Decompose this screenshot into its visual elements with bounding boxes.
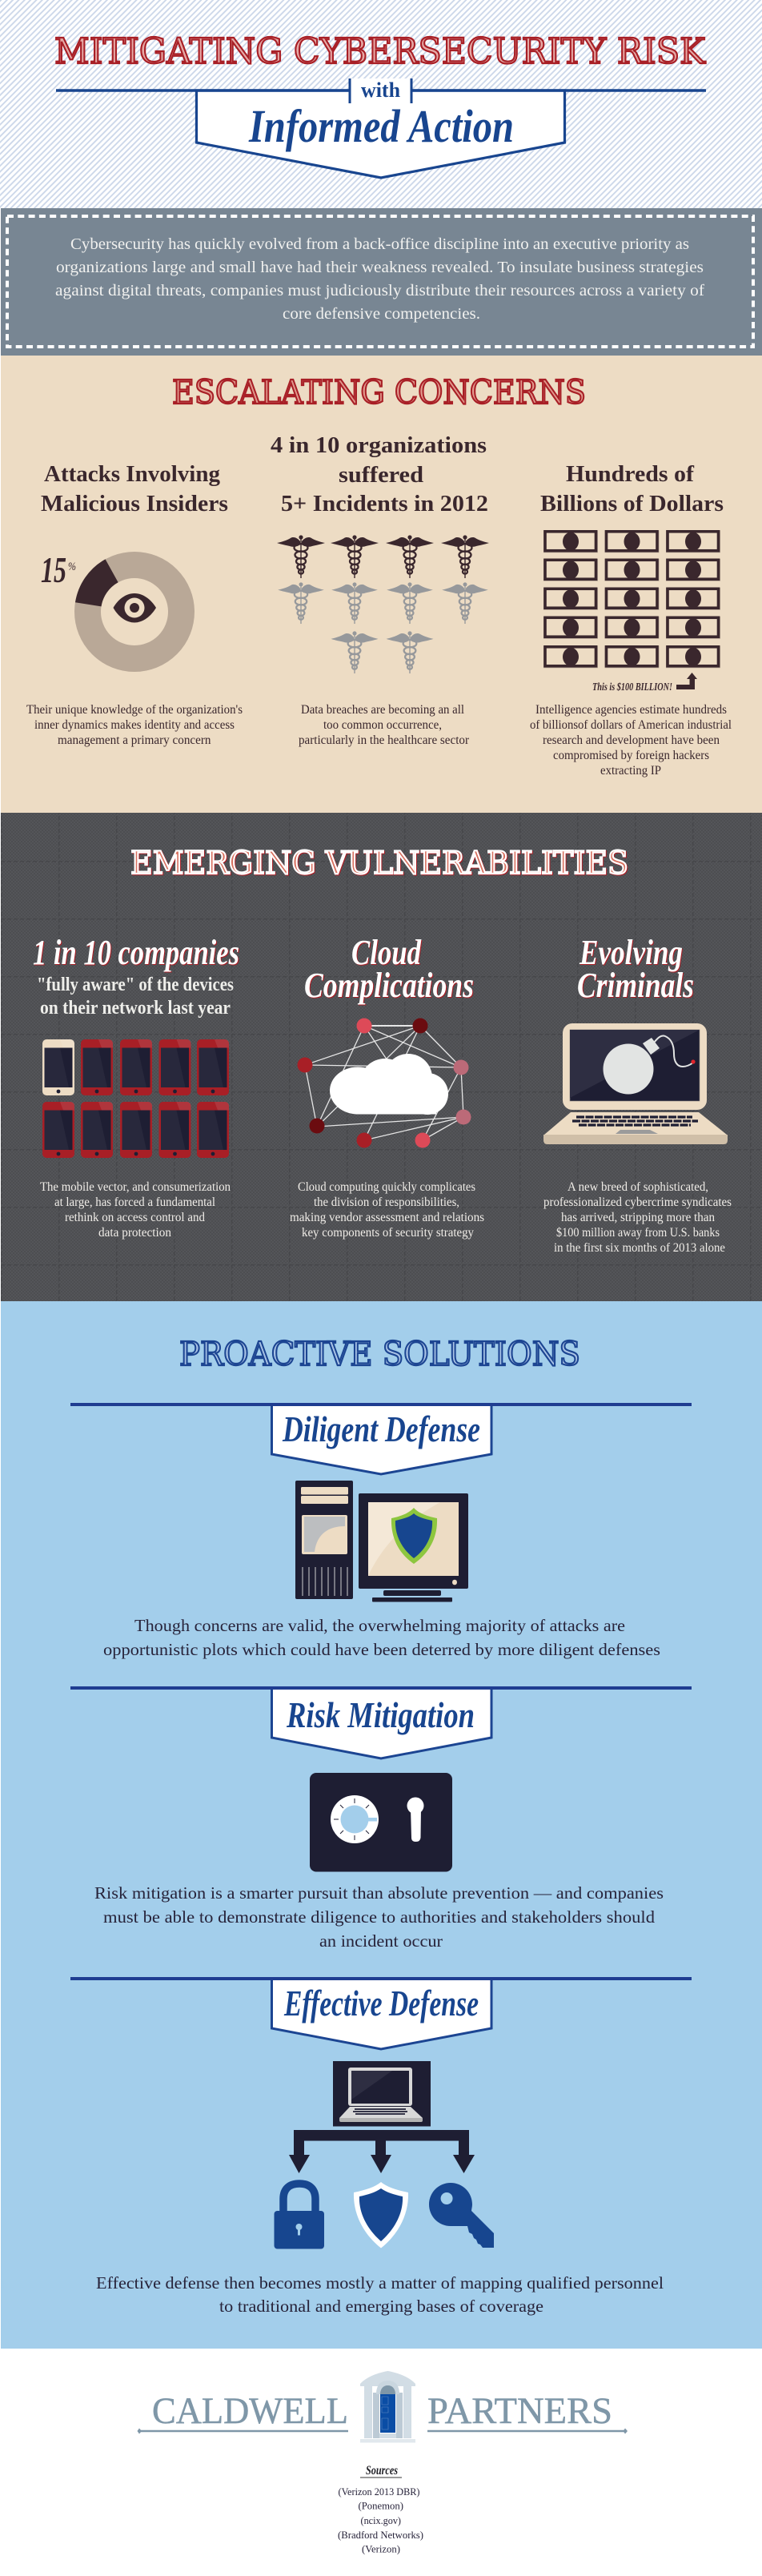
text: criminals: $100 million away from U.S. banks — [556, 1226, 720, 1240]
column heading: insiders — [41, 462, 228, 516]
icon: cloud network — [298, 1019, 471, 1148]
panel: intro — [1, 208, 762, 356]
intro text: organizations large and small have had their weakness revealed. To insulate business strategies — [56, 259, 704, 276]
panel: header — [0, 0, 762, 208]
heading: escalating concerns: ESCALATING CONCERNS — [172, 373, 586, 412]
text: mobile: data protection — [98, 1226, 171, 1240]
column heading: incidents: 5+ Incidents in 2012 — [281, 492, 488, 516]
text: cloud: the division of responsibilities, — [314, 1196, 459, 1209]
text: insiders: management a primary concern — [58, 733, 211, 747]
column subheading: fully aware: on their network last year — [40, 998, 231, 1019]
intro text: core defensive competencies. — [283, 305, 480, 323]
stat: 15 percent: 15 — [41, 549, 66, 590]
sources list: (Verizon) — [362, 2543, 400, 2554]
column subheading: fully aware — [37, 975, 234, 1019]
heading: proactive solutions: PROACTIVE SOLUTIONS — [179, 1335, 580, 1373]
column heading: evolving criminals — [577, 933, 694, 1005]
text: mobile: The mobile vector, and consumerization — [40, 1180, 231, 1194]
column heading: cloud complications — [304, 933, 474, 1005]
column heading: cloud complications: Complications — [304, 966, 474, 1005]
text: insiders — [26, 703, 243, 747]
text: diligent defense: opportunistic plots which could have been deterred by more diligent defenses — [103, 1640, 660, 1659]
column heading: incidents — [271, 433, 488, 516]
column heading: dollars: Hundreds of — [566, 462, 695, 487]
column heading: dollars: Billions of Dollars — [540, 492, 724, 516]
column heading: insiders: Attacks Involving — [44, 462, 220, 487]
chart: 15 percent donut — [41, 549, 181, 658]
column heading: incidents: suffered — [339, 463, 423, 488]
banner: diligent defense: Diligent Defense — [282, 1409, 480, 1449]
column heading: cloud complications: Cloud — [351, 933, 422, 972]
stat: 15 percent: % — [68, 561, 76, 573]
text: risk mitigation: an incident occur — [319, 1931, 443, 1951]
text: criminals: in the first six months of 2013 alone — [554, 1241, 725, 1255]
column heading: insiders: Malicious Insiders — [41, 492, 228, 516]
text: diligent defense — [103, 1616, 660, 1659]
sources — [338, 2464, 423, 2554]
text: risk mitigation — [94, 1883, 664, 1951]
icon: safe — [310, 1773, 452, 1872]
callout: 100 billion: This is $100 BILLION! — [592, 681, 672, 693]
icon: laptop — [333, 2061, 431, 2127]
section: effective defense — [70, 1979, 692, 2316]
panel: proactive solutions — [1, 1301, 762, 2349]
sources list: (Verizon 2013 DBR) — [338, 2486, 419, 2498]
text: dollars: extracting IP — [600, 764, 661, 778]
text: incidents: too common occurrence, — [323, 718, 442, 732]
section: risk mitigation — [70, 1688, 692, 1951]
text: effective defense: Effective defense then becomes mostly a matter of mapping qualified personnel — [96, 2273, 664, 2293]
text: cloud — [290, 1180, 484, 1240]
banner: risk mitigation: Risk Mitigation — [286, 1694, 475, 1735]
banner: effective defense: Effective Defense — [283, 1983, 479, 2023]
text: risk mitigation: Risk mitigation is a smarter pursuit than absolute prevention — and companies — [94, 1883, 664, 1903]
banner: diligent defense — [70, 1405, 692, 1474]
column heading: 1 in 10 companies: 1 in 10 companies — [33, 933, 239, 972]
text: incidents: particularly in the healthcare sector — [299, 733, 470, 747]
subtitle: with: with — [361, 78, 401, 102]
banner: effective defense — [70, 1979, 692, 2049]
subtitle: informed action: Informed Action — [248, 100, 514, 152]
icon: key — [429, 2183, 494, 2248]
arrows: branching to three icons — [289, 2130, 475, 2173]
column subheading: fully aware: "fully aware" of the devices — [37, 975, 234, 995]
icon: cloud — [330, 1054, 448, 1115]
intro text: against digital threats, companies must judiciously distribute their resources across a variety of — [55, 282, 704, 299]
sources list: (Ponemon) — [359, 2500, 403, 2511]
column heading: dollars — [540, 462, 724, 516]
banner: informed action — [56, 78, 706, 178]
column heading: incidents: 4 in 10 organizations — [271, 433, 487, 458]
text: cloud: Cloud computing quickly complicates — [298, 1180, 475, 1194]
icon: padlock — [274, 2184, 324, 2248]
text: insiders: Their unique knowledge of the organization's — [26, 703, 243, 717]
sources list: (Bradford Networks) — [338, 2529, 423, 2541]
arrow: up to banknotes — [676, 673, 697, 689]
panel: emerging vulnerabilities — [1, 813, 762, 1301]
text: dollars: of billionsof dollars of American industrial — [530, 718, 732, 732]
text: cloud: making vendor assessment and relations — [290, 1211, 484, 1224]
icons: banknote grid — [543, 530, 720, 668]
icon: computer with shield — [295, 1481, 468, 1601]
intro text — [55, 235, 704, 323]
sources heading: Sources — [366, 2464, 398, 2478]
callout: 100 billion — [592, 673, 697, 693]
text: criminals — [543, 1180, 732, 1255]
icon: door — [360, 2371, 415, 2442]
logo: caldwell partners — [138, 2371, 628, 2442]
text: effective defense: to traditional and emerging bases of coverage — [219, 2297, 543, 2316]
icons: caduceus grid — [277, 535, 489, 673]
icons: phone grid — [42, 1039, 229, 1158]
text: criminals: has arrived, stripping more than — [561, 1211, 715, 1224]
title: MITIGATING CYBERSECURITY RISK — [54, 32, 706, 72]
section: diligent defense — [70, 1405, 692, 1659]
text: risk mitigation: must be able to demonstrate diligence to authorities and stakeholders should — [103, 1907, 655, 1927]
text: criminals: professionalized cybercrime syndicates — [543, 1196, 732, 1209]
panel: escalating concerns — [1, 356, 762, 813]
text: cloud: key components of security strategy — [302, 1226, 474, 1240]
column heading: evolving criminals: Evolving — [579, 933, 683, 972]
heading: emerging vulnerabilities: EMERGING VULNERABILITIES — [130, 845, 628, 882]
icon: eye — [114, 593, 156, 623]
banner: risk mitigation — [70, 1688, 692, 1758]
wordmark: PARTNERS — [427, 2390, 612, 2432]
text: incidents: Data breaches are becoming an all — [301, 703, 464, 717]
text: insiders: inner dynamics makes identity and access — [34, 718, 235, 732]
text: diligent defense: Though concerns are valid, the overwhelming majority of attacks are — [134, 1616, 625, 1635]
wordmark — [152, 2390, 612, 2432]
sources list: (ncix.gov) — [360, 2514, 401, 2526]
wordmark: CALDWELL — [152, 2390, 348, 2432]
intro text: Cybersecurity has quickly evolved from a back-office discipline into an executive priority as — [70, 235, 689, 253]
text: mobile: at large, has forced a fundamental — [54, 1196, 215, 1209]
sources list — [338, 2486, 423, 2554]
text: criminals: A new breed of sophisticated, — [567, 1180, 708, 1194]
column heading: evolving criminals: Criminals — [577, 966, 694, 1005]
text: dollars — [530, 703, 732, 778]
text: dollars: compromised by foreign hackers — [553, 749, 709, 762]
text: dollars: research and development have been — [543, 733, 720, 747]
text: effective defense — [96, 2273, 664, 2316]
text: mobile: rethink on access control and — [65, 1211, 205, 1224]
text: dollars: Intelligence agencies estimate hundreds — [535, 703, 727, 717]
icon: shield — [354, 2182, 408, 2248]
text: incidents — [299, 703, 470, 747]
icon: laptop with bomb — [543, 1023, 728, 1144]
text: mobile — [40, 1180, 231, 1240]
